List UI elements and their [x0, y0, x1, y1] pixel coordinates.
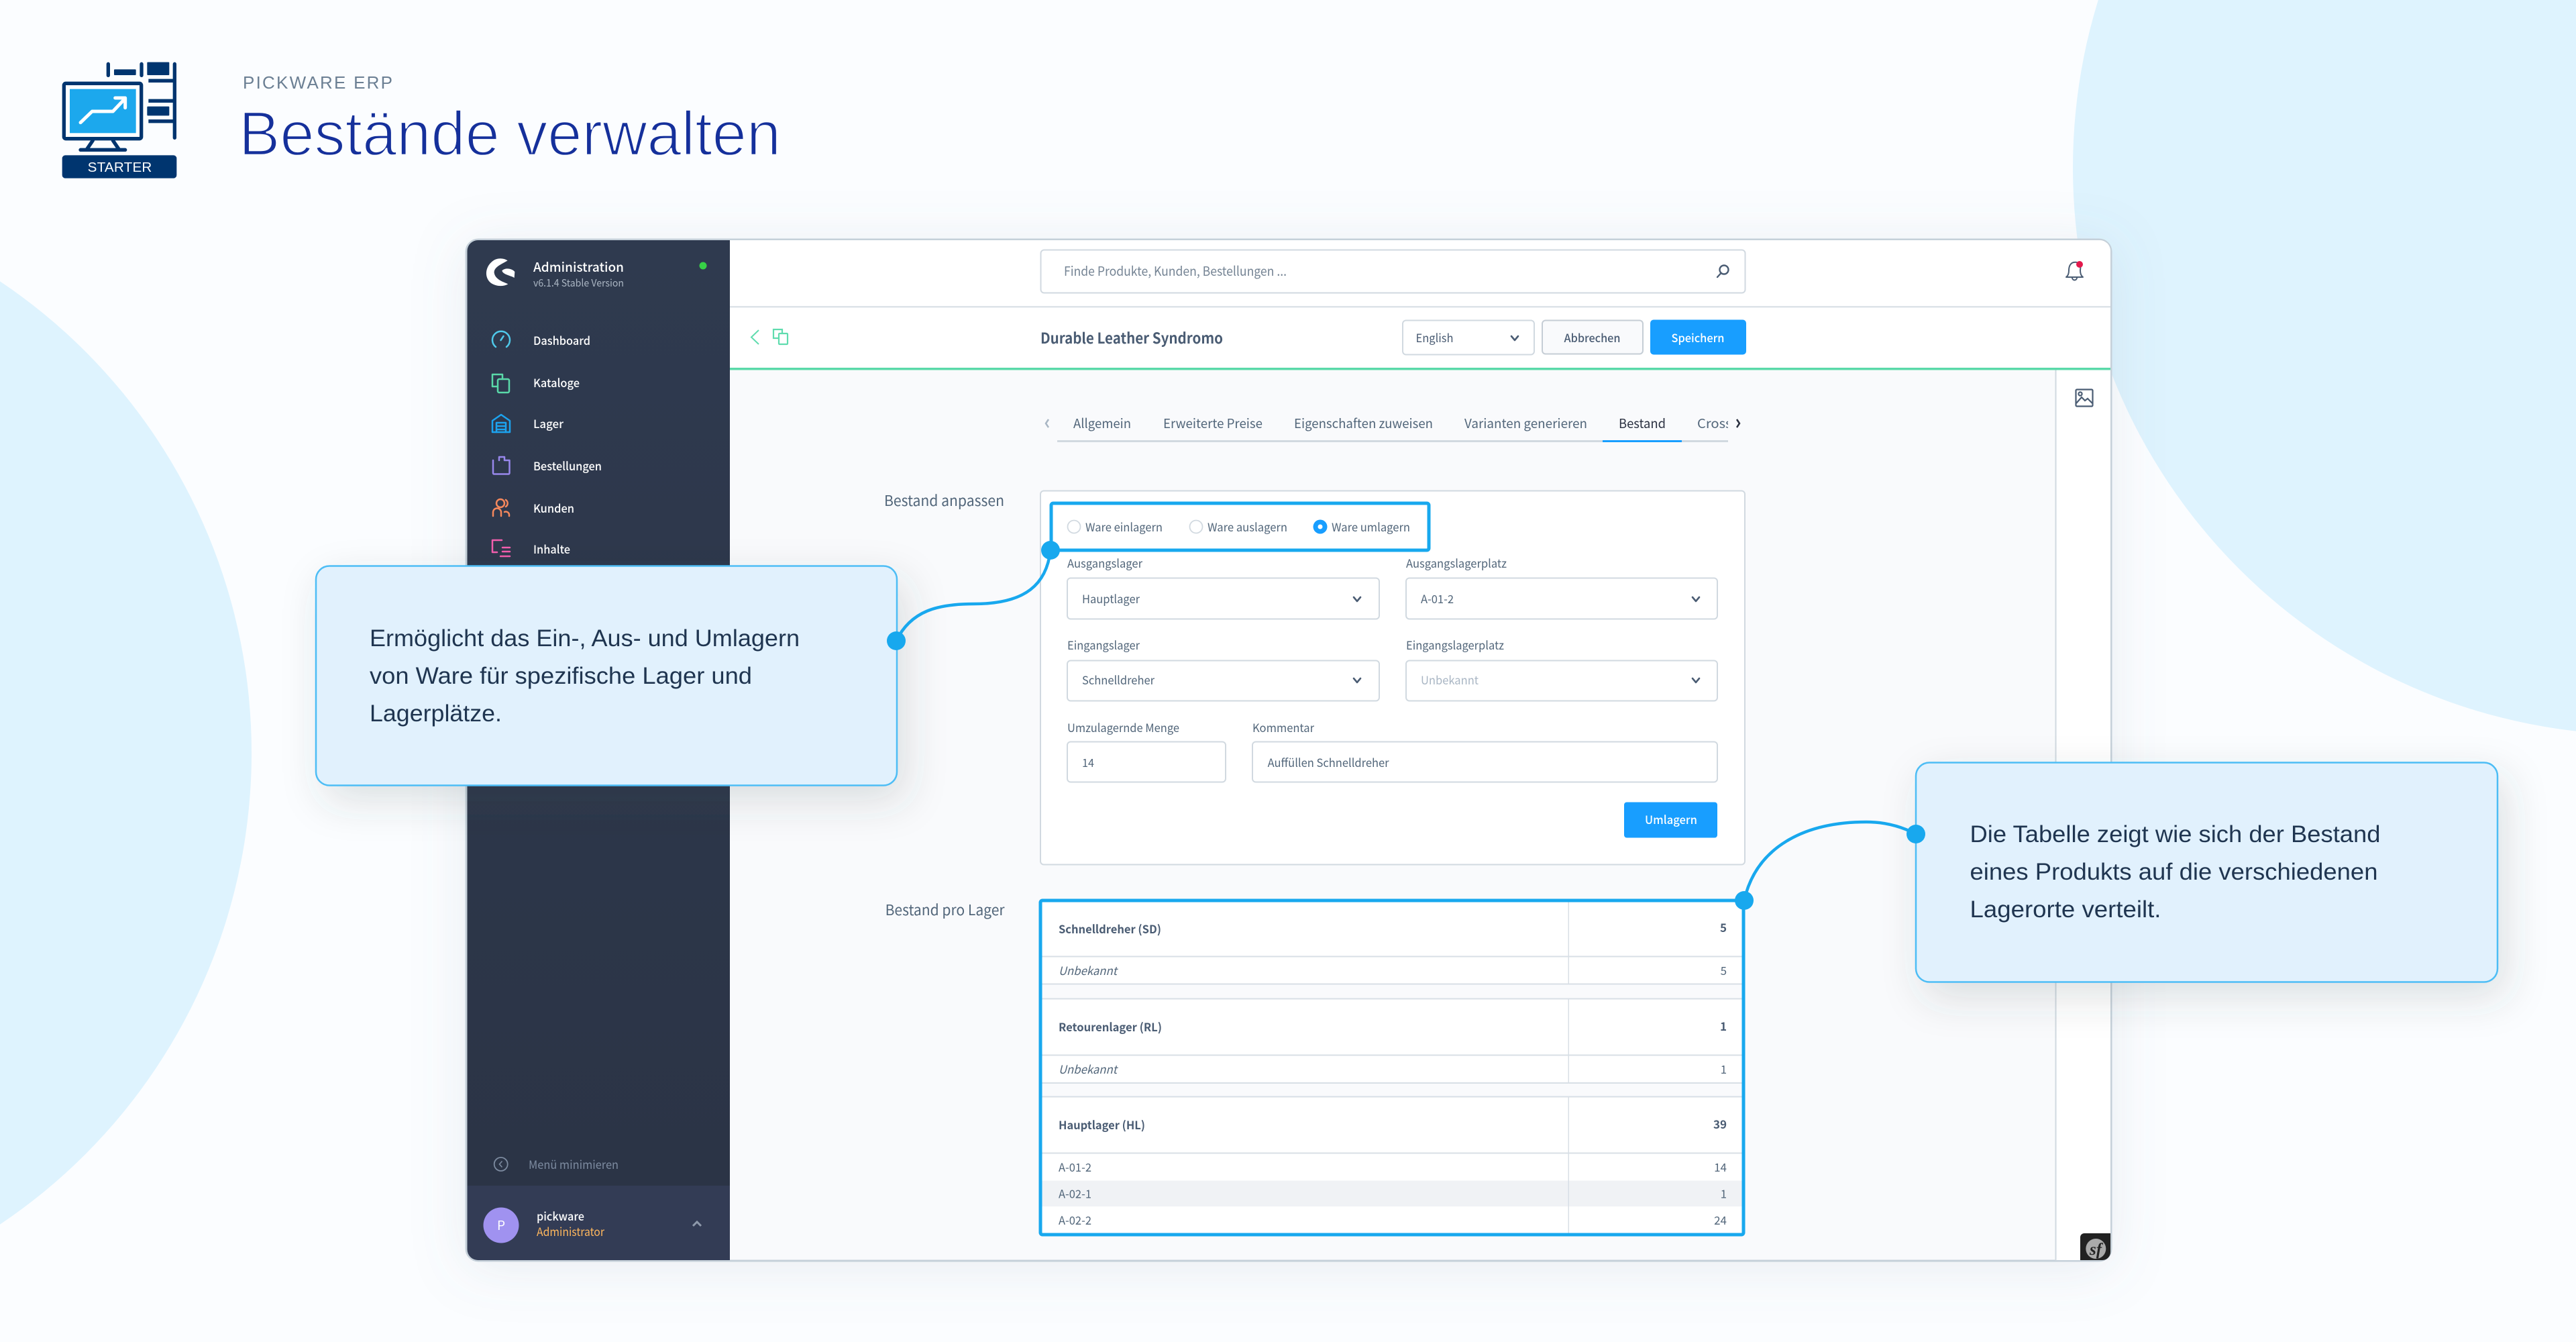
sidebar footer: Administrator: [537, 1223, 604, 1239]
field: Ausgangslager: Hauptlager: [1082, 590, 1140, 607]
button: Abbrechen: [1542, 321, 1643, 354]
panel: stock form: [1040, 491, 1745, 864]
nav: Bestellungen: [493, 457, 602, 474]
row: Retourenlager: 1: [1720, 1017, 1727, 1034]
row: Schnelldreher: [1059, 919, 1727, 978]
field: Umzulagernde Menge: Umzulagernde Menge: [1067, 719, 1179, 735]
sidebar footer: pickware: [537, 1207, 584, 1224]
field: Umzulagernde Menge: 14: [1082, 754, 1094, 770]
nav: Dashboard: Dashboard: [533, 331, 590, 348]
button: Umlagern: Umlagern: [1645, 811, 1697, 827]
tab bar: Varianten generieren: [1464, 414, 1587, 432]
tab bar: Bestand: [1619, 414, 1666, 432]
field: Ausgangslagerplatz: Ausgangslagerplatz: [1406, 554, 1507, 571]
row: Hauptlager: A-02-2: [1059, 1211, 1091, 1228]
nav: Inhalte: [492, 540, 570, 557]
row: Hauptlager: [1059, 1115, 1727, 1228]
icon: image: [2076, 389, 2093, 407]
row: Hauptlager: 39: [1713, 1115, 1727, 1132]
product name: Durable Leather Syndromo: [1040, 327, 1223, 348]
icon: back arrow: [751, 330, 759, 344]
icon: starter product badge: [62, 62, 176, 178]
field: Eingangslager: Schnelldreher: [1082, 671, 1155, 688]
callout: stock transfer: [316, 566, 897, 785]
callout: stock table: Lagerorte verteilt.: [1970, 896, 2161, 923]
row: Hauptlager: A-02-1: [1059, 1185, 1091, 1201]
field: Kommentar: [1252, 719, 1717, 782]
title: Bestände verwalten: [239, 99, 781, 168]
row: Hauptlager: 1: [1721, 1185, 1727, 1201]
search field: [1041, 250, 1746, 293]
connector: callout to table: [1735, 822, 1925, 910]
row: Schnelldreher: Schnelldreher (SD): [1059, 920, 1161, 937]
field: Kommentar: Kommentar: [1252, 719, 1314, 735]
field: Eingangslager: [1067, 636, 1379, 701]
icon: copy: [773, 329, 788, 344]
radio group highlighted: Ware umlagern: [1332, 518, 1410, 535]
nav: Lager: Lager: [533, 415, 564, 431]
nav: Lager: [492, 415, 564, 432]
callout: stock table: eines Produkts auf die verschiedenen: [1970, 859, 2377, 885]
nav: Kataloge: Kataloge: [533, 374, 580, 391]
field: Ausgangslager: Ausgangslager: [1067, 554, 1142, 571]
callout: stock transfer: von Ware für spezifische Lager und: [370, 663, 752, 689]
logo: [486, 258, 515, 286]
button: Speichern: Speichern: [1672, 329, 1724, 346]
callout: stock transfer: Ermöglicht das Ein-, Aus- und Umlagern: [370, 625, 800, 652]
row: Retourenlager: Retourenlager (RL): [1059, 1018, 1162, 1035]
tab bar: Eigenschaften zuweisen: [1294, 414, 1433, 432]
panel: sidebar: [467, 240, 730, 1260]
avatar: P: [497, 1216, 505, 1234]
product label: Administration: [533, 258, 624, 276]
field: Umzulagernde Menge: [1067, 719, 1226, 782]
row: Hauptlager: Hauptlager (HL): [1059, 1116, 1145, 1133]
icon: symfony toolbar: [2080, 1233, 2110, 1260]
panel: right toolbar: [2055, 370, 2110, 1260]
connector: callout to radio group: [887, 541, 1060, 650]
tab bar: [1045, 417, 1740, 442]
callout: stock table: Die Tabelle zeigt wie sich der Bestand: [1970, 821, 2380, 847]
status dot: [699, 262, 707, 270]
avatar: [483, 1208, 519, 1243]
row: Schnelldreher: 5: [1720, 919, 1727, 935]
radio group highlighted: Ware einlagern: [1085, 518, 1163, 535]
language select: English: [1415, 329, 1453, 346]
tab bar: Erweiterte Preise: [1163, 414, 1263, 432]
field: Kommentar: Auffüllen Schnelldreher: [1268, 754, 1389, 770]
field: Eingangslagerplatz: [1406, 636, 1717, 701]
row: Schnelldreher: 5: [1721, 962, 1727, 978]
panel: top bar: [730, 240, 2110, 370]
field: Eingangslagerplatz: Unbekannt: [1421, 671, 1479, 688]
section label: Bestand pro Lager: Bestand pro Lager: [885, 898, 1005, 920]
button: Umlagern: [1624, 803, 1717, 837]
field: Ausgangslagerplatz: A-01-2: [1421, 590, 1454, 607]
field: Eingangslager: Eingangslager: [1067, 636, 1140, 653]
nav: Kunden: Kunden: [533, 499, 574, 516]
button: Abbrechen: Abbrechen: [1564, 329, 1621, 346]
row: Retourenlager: 1: [1721, 1060, 1727, 1077]
sidebar footer: [467, 1186, 730, 1260]
icon: symfony toolbar: sf: [2089, 1241, 2104, 1259]
nav: Dashboard: [492, 331, 590, 348]
field: Ausgangslager: [1067, 554, 1379, 619]
icon: notification bell: [2066, 261, 2083, 280]
menu collapse: Menü minimieren: [529, 1155, 619, 1172]
callout: stock table: [1916, 762, 2498, 982]
row: Schnelldreher: Unbekannt: [1059, 962, 1119, 978]
panel: stock per warehouse table: [1040, 900, 1743, 1235]
version: v6.1.4 Stable Version: [533, 276, 624, 290]
nav: Kunden: [493, 499, 574, 516]
callout: stock transfer: Lagerplätze.: [370, 701, 502, 727]
section label: Bestand anpassen: Bestand anpassen: [884, 489, 1004, 511]
search field: Finde Produkte, Kunden, Bestellungen ...: [1064, 262, 1287, 280]
language select: [1403, 321, 1534, 354]
field: Eingangslagerplatz: Eingangslagerplatz: [1406, 636, 1504, 653]
row: Hauptlager: A-01-2: [1059, 1158, 1091, 1175]
row: Hauptlager: 14: [1714, 1158, 1727, 1175]
radio group highlighted: Ware auslagern: [1208, 518, 1287, 535]
nav: Bestellungen: Bestellungen: [533, 457, 602, 474]
row: Hauptlager: 24: [1714, 1211, 1727, 1228]
panel: application window: [466, 240, 2111, 1261]
nav: Kataloge: [492, 374, 580, 393]
tab bar: Cross-Selling: [1697, 414, 1779, 432]
nav: Inhalte: Inhalte: [533, 540, 570, 557]
row: Retourenlager: [1059, 1017, 1727, 1077]
button: Speichern: [1650, 319, 1746, 354]
field: Ausgangslagerplatz: [1406, 554, 1717, 619]
row: Retourenlager: Unbekannt: [1059, 1060, 1119, 1077]
eyebrow: product name: PICKWARE ERP: [243, 72, 392, 93]
tab bar: Allgemein: [1073, 414, 1131, 432]
radio group highlighted: [1051, 503, 1429, 550]
icon: starter product badge: STARTER: [88, 160, 152, 175]
